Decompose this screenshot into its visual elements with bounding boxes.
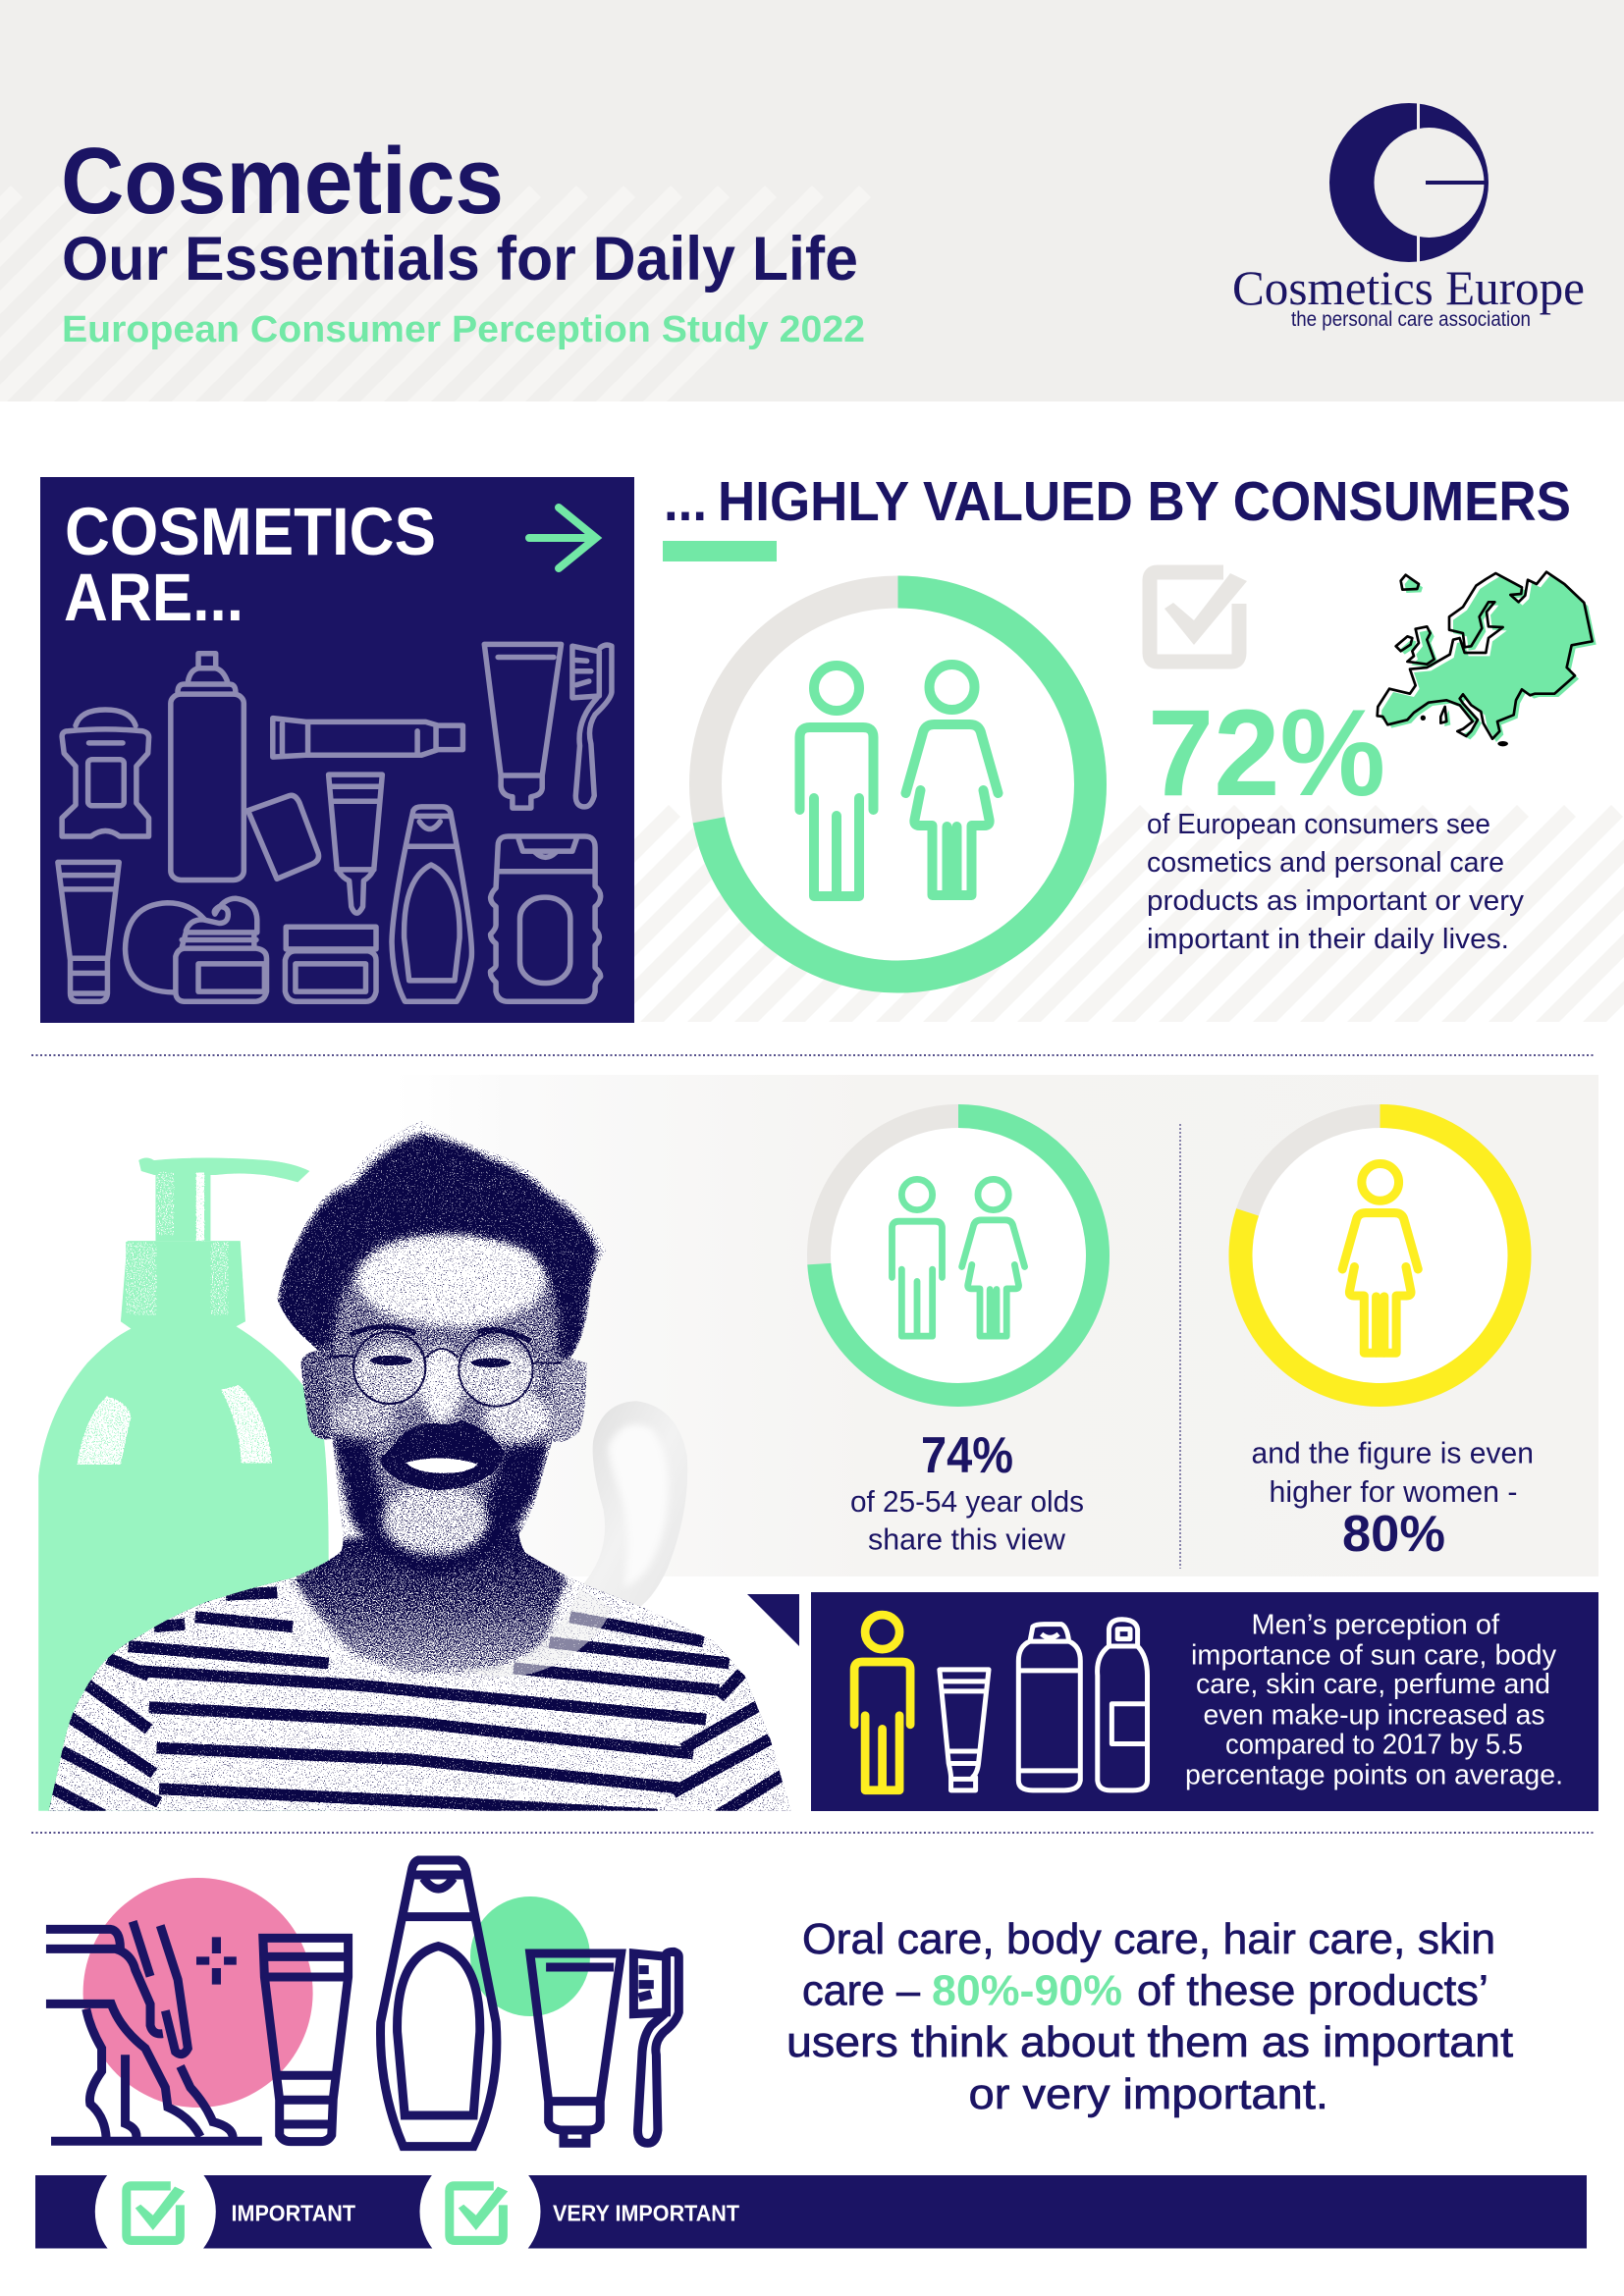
cream swatch shadow on shirt [462,1587,611,1677]
text block: 74%: of 25-54 year olds [850,1484,1084,1519]
text block: 74% [850,1427,1084,1557]
text block: men's perception [1185,1610,1563,1790]
neck [293,1529,568,1675]
text block: 74%: 74% [921,1427,1013,1484]
glasses and eyes [327,1332,562,1407]
text block: European consumers [1147,809,1525,955]
icon: woman [1342,1164,1418,1353]
green accent bar [663,541,777,561]
text block: oral care: users think about them as important [786,2018,1513,2066]
title [61,129,865,350]
legend item: very important: VERY IMPORTANT [553,2201,739,2226]
text block: oral care: of these products’ [1137,1967,1489,2014]
text block: men's perception: Men’s perception of [1251,1610,1500,1641]
illustration: cream swatch [580,1401,687,1612]
dotted dividers [31,1055,1595,1833]
head detail [327,1233,562,1574]
navy corner triangle [747,1594,799,1646]
icon: man and woman [892,1179,1025,1336]
photo: smiling man in striped shirt [49,1121,790,1815]
icon: shaving legs [46,1921,262,2141]
text block: oral care [786,1915,1513,2118]
dotted vertical divider [1179,1124,1181,1569]
icon: man and woman [799,665,998,896]
text block: European consumers: products as important or very [1147,885,1525,917]
icon: toothbrush [633,1951,678,2143]
text block: men's perception: even make-up increased as [1204,1700,1545,1732]
icon: shampoo bottle [381,1860,497,2147]
panel heading: ARE... [64,560,244,635]
map of Europe [1378,572,1597,746]
text block: men's perception: compared to 2017 by 5.5 [1225,1730,1523,1761]
text block: oral care: or very important. [968,2070,1328,2118]
text block: European consumers: of European consumers see [1147,809,1490,840]
icons: skin care, tube, shampoo, toothpaste, toothbrush [46,1860,678,2147]
header band [0,0,1624,401]
hair [277,1134,598,1362]
text block: men's perception: importance of sun care, body [1191,1639,1556,1671]
text block: men's perception: percentage points on average. [1185,1759,1563,1790]
subtitle: Our Essentials for Daily Life [62,225,858,294]
legend item: important: IMPORTANT [232,2201,355,2226]
icon: grey checkbox [1150,572,1247,662]
panel: men's perception [811,1592,1598,1811]
icon: tube [263,1938,349,2142]
heading: highly valued by consumers: ... [664,470,707,533]
text block: oral care: Oral care, body care, hair care, skin [802,1915,1495,1963]
shirt stripes [51,1592,785,1815]
panel: age and gender stats background [393,1075,1598,1576]
illustration: pump bottle [38,1158,329,1811]
logo: Cosmetics Europe: the personal care association [1291,308,1531,331]
text block: 80% [1251,1435,1534,1563]
donut chart: 80% [1241,1116,1520,1395]
ears [296,1346,334,1446]
logo: Cosmetics Europe [1232,98,1585,331]
moustache and mouth [380,1420,504,1490]
donut chart: 72% [705,592,1090,977]
text block: 74%: share this view [868,1522,1066,1557]
legend item: very important [450,2186,739,2240]
title: Cosmetics [61,129,504,234]
legend banner [35,2175,1587,2248]
text block: oral care: 80%-90% [932,1967,1122,2014]
icons: white products [940,1620,1148,1790]
text block: European consumers: cosmetics and personal care [1147,847,1504,879]
stat: 72%: 72% [1148,685,1385,822]
panel heading: COSMETICS [65,494,436,569]
panel heading [64,494,436,635]
green circle [470,1896,590,2016]
donut chart: 74% [819,1116,1098,1395]
arrow [529,507,596,568]
text block: oral care: care – [802,1967,921,2014]
text block: men's perception: care, skin care, perfume and [1196,1669,1550,1700]
icons: cosmetic products outlines [58,644,612,1001]
text block: 80%: 80% [1342,1506,1445,1563]
heading: highly valued by consumers: HIGHLY VALUED BY CONSUMERS [718,470,1571,533]
study line: European Consumer Perception Study 2022 [62,309,865,350]
heading: highly valued by consumers [663,470,1571,561]
text block: European consumers: important in their daily lives. [1147,924,1509,955]
icon: toothpaste tube [530,1953,622,2143]
text block: 80%: and the figure is even [1251,1435,1534,1470]
text block: 80%: higher for women - [1269,1474,1518,1509]
panel: cosmetics are [40,477,634,1023]
pink circle [83,1878,313,2108]
logo: Cosmetics Europe: Cosmetics Europe [1232,260,1585,315]
background stripes: section one [452,805,1624,1022]
icon: yellow man [854,1615,910,1790]
legend item: important [127,2186,355,2240]
